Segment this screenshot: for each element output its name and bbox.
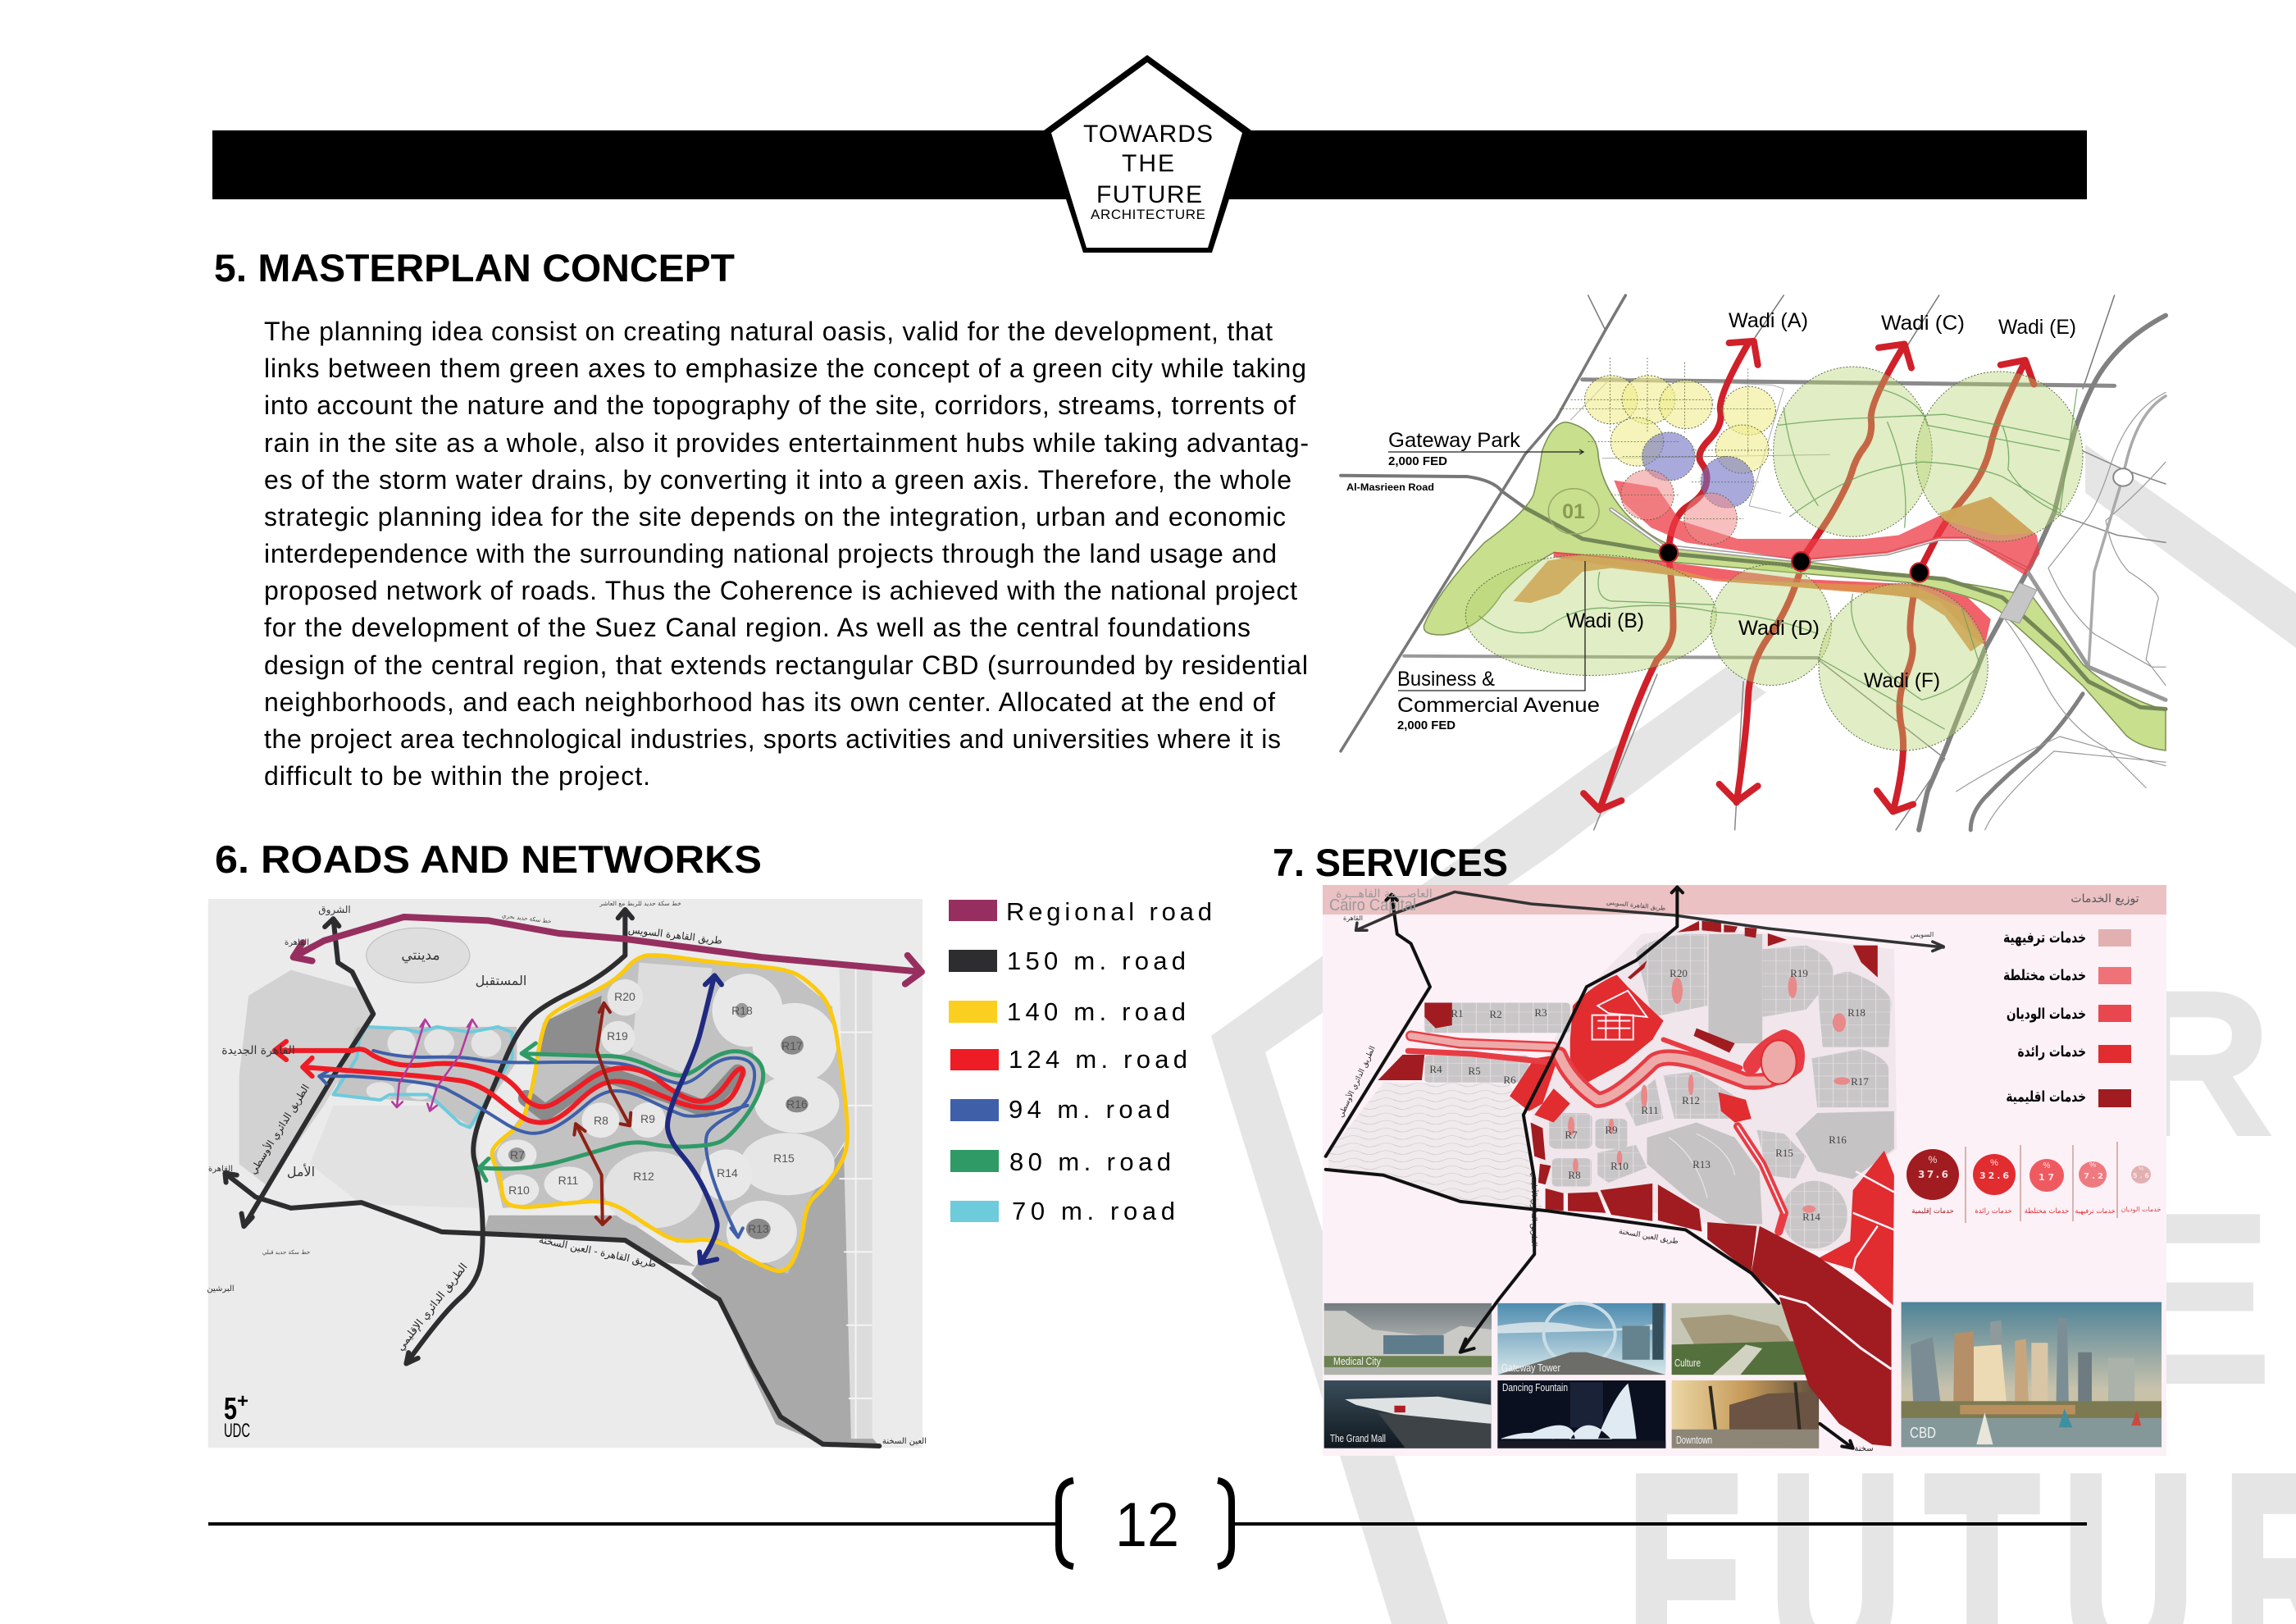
map labels: 2,000 FED xyxy=(1397,718,1456,732)
neighbourhood numbers: R7 xyxy=(510,1148,525,1161)
map labels: 01 xyxy=(1562,500,1585,523)
photo grid xyxy=(1324,1302,2162,1448)
neighbourhood numbers: R11 xyxy=(558,1174,579,1187)
services labels: القاهرة xyxy=(1343,915,1363,922)
district numbers: R18 xyxy=(1847,1006,1866,1019)
heading: services: 7. SERVICES xyxy=(1273,841,1508,884)
share: wadi 5.6: 5.6 xyxy=(2133,1172,2149,1179)
map labels: Wadi (A) xyxy=(1729,309,1808,332)
services labels: الطريق الدائري الأوسطي xyxy=(1336,1044,1378,1119)
map labels: الطريق الدائري الإقليمي xyxy=(394,1261,470,1353)
panel background and title strip xyxy=(1323,885,2166,1456)
panel: services map xyxy=(1323,885,2166,1456)
map labels: Wadi (C) xyxy=(1881,312,1965,335)
map labels: الأمل xyxy=(287,1163,315,1179)
legend item: recreational services: خدمات ترفيهية xyxy=(2003,928,2086,947)
share: wadi 5.6: % xyxy=(2139,1166,2143,1172)
80 m road xyxy=(479,1043,763,1180)
footer: page number with rule and brackets xyxy=(208,1480,2087,1567)
heading: roads and networks: 6. ROADS AND NETWORKS xyxy=(215,837,762,881)
share: mixed 17: 17 xyxy=(2039,1172,2054,1183)
neighbourhood numbers: R15 xyxy=(773,1152,795,1165)
neighbourhood circles xyxy=(1465,358,2083,750)
legend: road widths xyxy=(949,897,1212,1225)
text block: masterplan description xyxy=(264,317,1309,791)
green spine park xyxy=(1424,422,2166,750)
share: recreational 7.2: % xyxy=(2089,1161,2096,1169)
district numbers: R1 xyxy=(1451,1007,1464,1020)
140 m road ring xyxy=(492,956,847,1271)
logo: 5+ UDC: + xyxy=(237,1390,248,1412)
map labels xyxy=(1346,309,2076,732)
map labels: Wadi (B) xyxy=(1566,609,1644,632)
road overlays xyxy=(225,910,922,1446)
map labels: Wadi (D) xyxy=(1738,617,1820,640)
photo captions: Downtown xyxy=(1676,1434,1712,1446)
text block: masterplan description: interdependence with the surrounding national projects through the land usage and xyxy=(264,539,1277,568)
share: mixed 17: خدمات مختلطة xyxy=(2025,1207,2069,1216)
chart: masterplan concept map xyxy=(1341,295,2166,830)
services labels: الطريق الدائري الأقليمي xyxy=(1529,1172,1539,1246)
district numbers xyxy=(1429,967,1869,1223)
share: pioneer 32.6: 32.6 xyxy=(1979,1170,2009,1181)
logo: pentagon badge: THE xyxy=(1122,150,1174,177)
map labels: Business & xyxy=(1397,668,1495,691)
heading: masterplan concept: 5. MASTERPLAN CONCEPT xyxy=(214,246,735,290)
legend item: mixed services xyxy=(2003,966,2131,984)
share: mixed 17 xyxy=(2025,1159,2069,1216)
map labels: العين السخنة xyxy=(882,1437,927,1446)
map labels: خط سكة حديد بحري xyxy=(502,912,552,925)
text block: masterplan description: strategic planning idea for the site depends on the integration, urban and economic xyxy=(264,502,1286,531)
axis roads xyxy=(667,975,722,1263)
share: wadi 5.6: خدمات الوديان xyxy=(2121,1206,2161,1213)
neighbourhood numbers: R18 xyxy=(731,1004,753,1017)
photo captions: CBD xyxy=(1910,1425,1936,1441)
neighbourhood numbers: R8 xyxy=(594,1114,608,1127)
text block: masterplan description: links between them green axes to emphasize the concept of a green city while taking xyxy=(264,354,1306,383)
legend item: recreational services xyxy=(2003,928,2131,947)
map labels: Wadi (F) xyxy=(1864,669,1940,692)
legend item: regional services xyxy=(2006,1088,2131,1107)
map labels: Al-Masrieen Road xyxy=(1346,481,1434,493)
map labels: الطريق الدائري الأوسطي xyxy=(246,1082,312,1177)
photo captions xyxy=(1330,1355,1936,1446)
district numbers: R14 xyxy=(1802,1211,1820,1223)
district numbers: R12 xyxy=(1682,1094,1700,1106)
neighbourhood numbers: R20 xyxy=(614,990,636,1003)
map labels xyxy=(207,900,927,1446)
legend item: regional services: خدمات اقليمية xyxy=(2006,1088,2086,1106)
text block: masterplan description: rain in the site as a whole, also it provides entertainment hubs while taking advantag- xyxy=(264,428,1309,458)
text block: masterplan description: The planning idea consist on creating natural oasis, valid for the development, that xyxy=(264,317,1273,346)
header bar xyxy=(212,130,2087,199)
district numbers: R8 xyxy=(1568,1169,1581,1181)
district numbers: R15 xyxy=(1775,1147,1793,1159)
neighbourhood numbers: R16 xyxy=(786,1097,808,1111)
district numbers: R6 xyxy=(1503,1074,1516,1086)
district shapes xyxy=(1424,927,1897,1251)
text block: masterplan description: difficult to be within the project. xyxy=(264,761,650,791)
neighbourhood numbers xyxy=(508,990,808,1235)
map base: roads and thin lines xyxy=(1341,295,2166,830)
black roads xyxy=(1326,887,1943,1448)
share: pioneer 32.6: % xyxy=(1990,1158,1998,1168)
photo captions: Medical City xyxy=(1333,1355,1381,1367)
share: regional 37.6 xyxy=(1906,1149,1959,1216)
district numbers: R16 xyxy=(1829,1134,1847,1146)
watermark: FUTUR lettering xyxy=(1629,1428,2296,1624)
district numbers: R19 xyxy=(1790,967,1808,979)
share: mixed 17: % xyxy=(2043,1161,2051,1170)
footer: page number with rule and brackets: 12 xyxy=(1115,1490,1179,1560)
text block: masterplan description: for the development of the Suez Canal region. As well as the central foundations xyxy=(264,613,1250,642)
share: regional 37.6: % xyxy=(1929,1154,1938,1166)
150 m roads xyxy=(242,919,373,1226)
intersection nodes xyxy=(1660,543,1929,582)
text block: masterplan description: into account the nature and the topography of the site, corridors, streams, torrents of xyxy=(264,390,1296,420)
services labels: سخنة xyxy=(1854,1444,1874,1453)
logo: pentagon badge: ARCHITECTURE xyxy=(1091,207,1205,222)
services labels: توزيع الخدمات xyxy=(2070,892,2139,906)
legend item: 150 m road: 150 m. road xyxy=(1007,947,1186,975)
district numbers: R5 xyxy=(1468,1065,1481,1077)
services labels: طريق القاهرة السويس xyxy=(1606,898,1666,912)
services labels: العاصـــمة القاهـــرة xyxy=(1336,887,1433,901)
map labels: طريق القاهرة - العين السخنة xyxy=(538,1234,658,1270)
legend item: 140 m road: 140 m. road xyxy=(1007,997,1186,1026)
logo: 5+ UDC xyxy=(224,1390,250,1442)
logo: pentagon badge: FUTURE xyxy=(1096,181,1202,208)
share: recreational 7.2: 7.2 xyxy=(2084,1172,2103,1181)
neighbourhood numbers: R10 xyxy=(508,1184,530,1197)
services labels: Cairo Capital xyxy=(1329,896,1416,915)
text block: masterplan description: neighborhoods, and each neighborhood has its own center. Allocated at the end of xyxy=(264,687,1275,717)
services zones: ribbon and red blocks xyxy=(1378,921,1894,1446)
district numbers: R2 xyxy=(1489,1008,1502,1020)
text block: masterplan description: design of the central region, that extends rectangular CBD (surrounded by residential xyxy=(264,650,1308,680)
legend item: wadi services: خدمات الوديان xyxy=(2007,1005,2086,1023)
neighbourhood numbers: R17 xyxy=(781,1039,803,1052)
share: wadi 5.6 xyxy=(2121,1166,2161,1213)
chart: roads network map xyxy=(207,899,927,1448)
share: regional 37.6: خدمات إقليمية xyxy=(1911,1207,1954,1216)
green inner road lines xyxy=(1478,389,2077,729)
district numbers: R7 xyxy=(1565,1129,1578,1141)
district numbers: R17 xyxy=(1851,1075,1869,1088)
share: regional 37.6: 37.6 xyxy=(1918,1169,1948,1180)
services labels: طريق العين السخنة xyxy=(1618,1228,1679,1246)
legend item: 70 m road: 70 m. road xyxy=(1012,1197,1175,1225)
map labels: المستقبل xyxy=(476,973,526,988)
district numbers: R3 xyxy=(1534,1006,1547,1019)
text block: masterplan description: proposed network of roads. Thus the Coherence is achieved with the national project xyxy=(264,576,1297,605)
124 m roads xyxy=(275,1042,743,1123)
services labels: السويس xyxy=(1911,931,1934,938)
map labels: خط سكة حديد قبلي xyxy=(262,1249,310,1256)
map labels: 2,000 FED xyxy=(1388,454,1447,468)
map labels: القاهرة الجديدة xyxy=(221,1044,295,1057)
94 m roads xyxy=(373,1051,754,1238)
logo: 5+ UDC: 5 xyxy=(224,1392,237,1426)
red and orange commercial bands xyxy=(1514,481,2039,651)
watermark: pentagon logo and letters xyxy=(1211,445,2296,1624)
logo: pentagon badge xyxy=(1044,55,1251,253)
share: recreational 7.2 xyxy=(2075,1161,2116,1215)
share: pioneer 32.6 xyxy=(1973,1154,2016,1216)
legend item: pioneer services: خدمات رائدة xyxy=(2018,1042,2086,1061)
neighbourhood numbers: R12 xyxy=(633,1170,654,1183)
chart: service share circles xyxy=(1906,1142,2161,1223)
district numbers: R4 xyxy=(1429,1063,1442,1075)
red wadi lines xyxy=(1583,341,2034,812)
watermark: pentagon logo and letters: R xyxy=(2130,956,2270,1172)
legend item: wadi services xyxy=(2007,1005,2131,1023)
map labels: الشروق xyxy=(318,904,351,916)
legend item: 94 m road: 94 m. road xyxy=(1009,1095,1170,1124)
photo captions: Gateway Tower xyxy=(1501,1362,1561,1374)
logo: pentagon badge: TOWARDS xyxy=(1083,121,1213,148)
regional road xyxy=(294,917,922,984)
photo captions: Culture xyxy=(1674,1357,1701,1369)
share: recreational 7.2: خدمات ترفيهية xyxy=(2075,1207,2116,1215)
legend item: pioneer services xyxy=(2018,1042,2131,1063)
neighbourhood numbers: R14 xyxy=(717,1166,738,1179)
map labels: البرشين xyxy=(207,1284,235,1293)
text block: masterplan description: es of the storm water drains, by converting it into a green axis. Therefore, the whole xyxy=(264,465,1292,495)
text block: masterplan description: the project area technological industries, sports activities and universities where it is xyxy=(264,724,1281,754)
map labels: Wadi (E) xyxy=(1998,316,2076,339)
logo: 5+ UDC: UDC xyxy=(224,1420,250,1442)
map labels: مدينتي xyxy=(401,947,440,964)
share: pioneer 32.6: خدمات رائدة xyxy=(1975,1207,2012,1216)
neighbourhood numbers: R9 xyxy=(640,1112,655,1125)
district numbers: R11 xyxy=(1641,1104,1659,1116)
neighbourhood numbers: R19 xyxy=(607,1029,628,1042)
map labels: القاهرة xyxy=(285,938,309,947)
map labels: طريق القاهرة السويس xyxy=(627,924,723,947)
legend item: 124 m road: 124 m. road xyxy=(1009,1045,1187,1074)
district numbers: R10 xyxy=(1610,1160,1629,1172)
legend item: mixed services: خدمات مختلطة xyxy=(2003,966,2086,984)
photo captions: The Grand Mall xyxy=(1330,1432,1386,1444)
map labels: Gateway Park xyxy=(1388,429,1521,452)
legend item: regional road: Regional road xyxy=(1006,897,1212,926)
map labels: خط سكة حديد للربط مع العاشر xyxy=(599,900,681,907)
map base: greyscale plan xyxy=(208,899,922,1448)
district numbers: R13 xyxy=(1692,1158,1711,1170)
district numbers: R9 xyxy=(1605,1124,1618,1136)
topography area xyxy=(1328,1083,1542,1209)
legend: service types xyxy=(2003,928,2131,1107)
map labels: Commercial Avenue xyxy=(1397,694,1600,717)
watermark: pentagon logo and letters: E xyxy=(2116,1171,2269,1427)
photo captions: Dancing Fountain xyxy=(1502,1381,1568,1394)
services labels xyxy=(1329,887,2139,1453)
legend item: 80 m road: 80 m. road xyxy=(1009,1147,1171,1176)
map labels: القاهرة xyxy=(208,1165,233,1174)
neighbourhood numbers: R13 xyxy=(748,1222,769,1235)
70 m road xyxy=(333,1027,512,1128)
district numbers: R20 xyxy=(1670,967,1688,979)
